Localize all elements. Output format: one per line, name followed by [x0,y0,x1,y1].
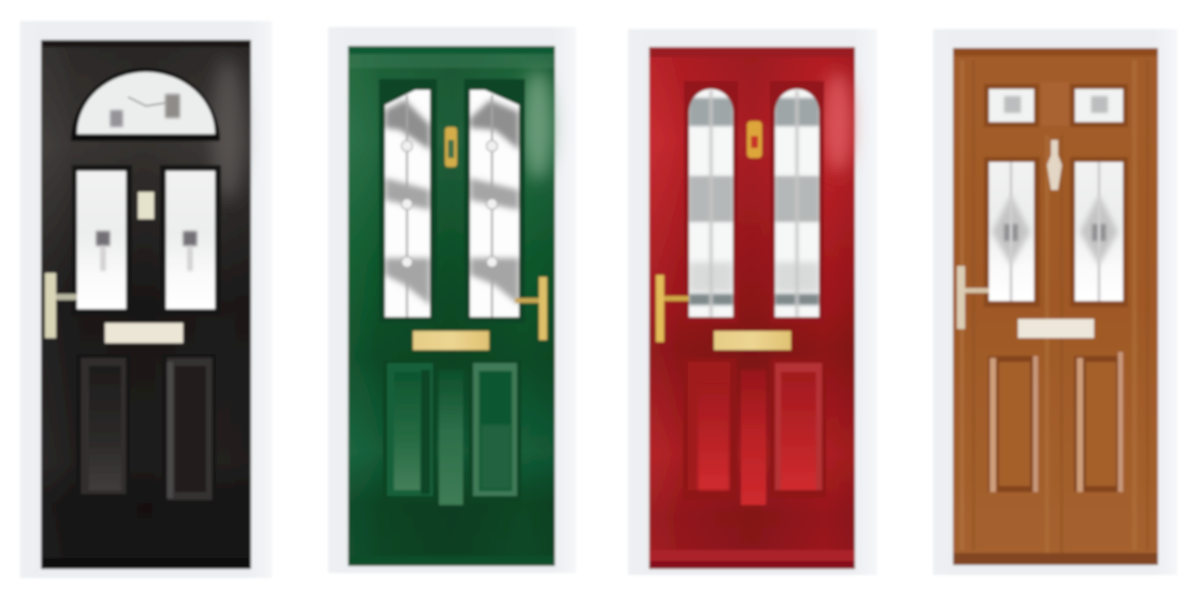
door handle [515,277,547,340]
lower right panel [469,360,521,502]
left glazed panel [379,79,437,323]
door handle [957,266,989,329]
door handle [656,275,689,342]
door frame [328,27,576,573]
door knocker [1047,140,1062,190]
lower right panel [1074,352,1123,492]
right glazed panel [464,79,525,323]
lower centre stile highlight [439,370,463,505]
door leaf [41,40,251,569]
door leaf [348,46,555,566]
door handle [45,273,77,338]
right glazed panel [770,81,824,323]
door frame [933,29,1177,575]
upper right small window [1070,84,1128,127]
letterbox [1018,319,1094,338]
door frame [628,29,877,575]
door: oak [933,29,1177,575]
door: green [328,27,576,573]
door knocker [747,121,762,158]
right glazed panel [160,165,221,315]
upper left small window [984,84,1039,127]
right glazed panel [1070,157,1128,307]
door knocker [445,127,457,167]
lower right panel [770,358,826,498]
lower left panel [76,354,130,498]
door: red [628,29,877,575]
door leaf [649,47,855,569]
letterbox [413,331,489,350]
left glazed panel [984,157,1040,307]
left glazed panel [72,165,132,315]
door frame [20,21,272,578]
lower left panel [988,356,1038,492]
door knocker [138,192,154,219]
lower centre stile highlight [741,370,766,505]
lower left panel [383,360,436,502]
letterbox [714,331,791,350]
fanlight arched window [71,68,220,141]
left glazed panel [684,81,738,323]
letterbox [105,323,183,343]
door: black [20,21,272,578]
lower right panel [162,354,216,502]
lower left panel [683,358,737,500]
door leaf [953,48,1158,565]
